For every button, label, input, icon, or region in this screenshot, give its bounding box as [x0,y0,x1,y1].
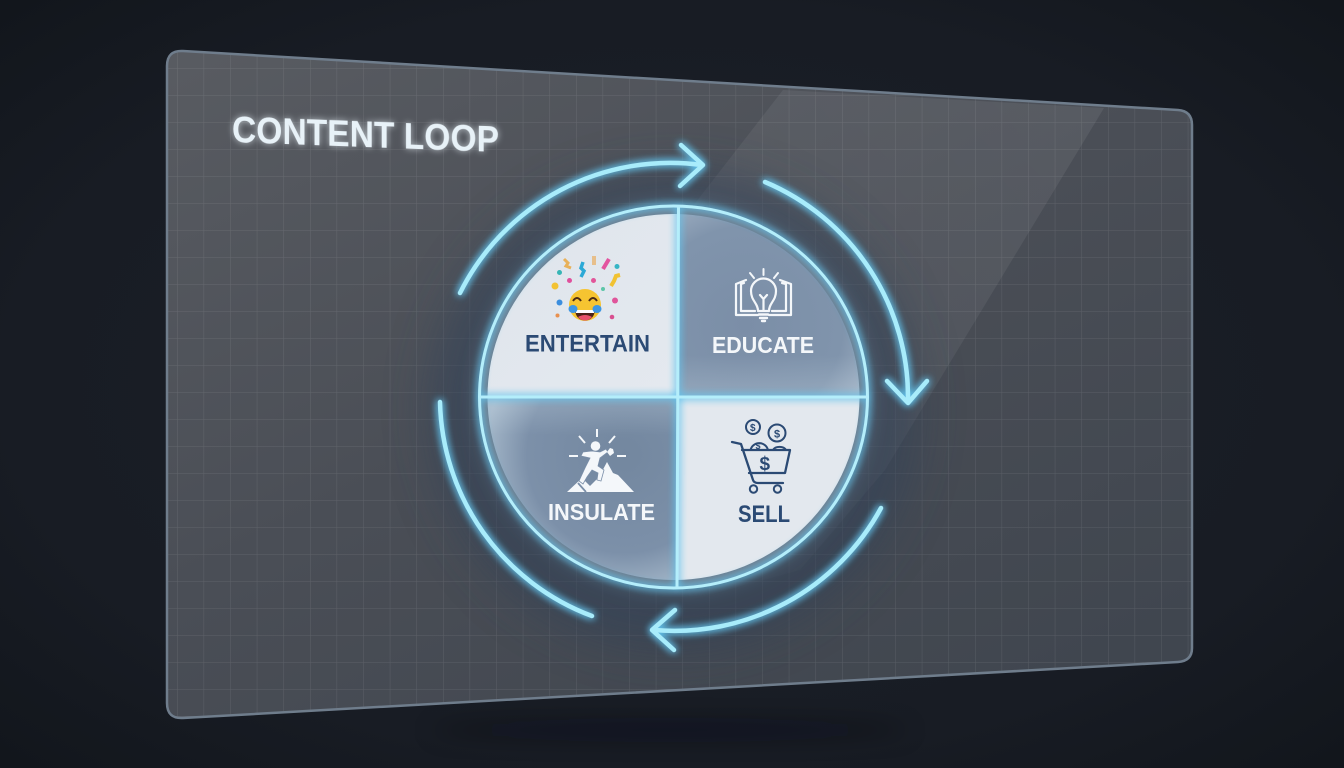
icon: dollar signs: $ [760,454,770,475]
quadrant: educate [679,214,860,396]
circle glow [476,202,872,592]
arrow: top [460,145,703,293]
icon: book and light bulb [736,269,791,321]
label: educate: EDUCATE [712,332,814,358]
quadrant: entertain [488,214,677,396]
icon: dollar signs: $ [774,428,780,440]
label: sell: SELL [738,501,790,528]
wheel ring and dividers [480,206,868,588]
label: entertain: ENTERTAIN [525,330,650,358]
panel shadow [430,724,910,736]
quadrant wheel [480,206,868,588]
icon: laughing emoji with confetti [552,256,620,321]
arrow: right [765,182,927,403]
quadrant: sell [678,398,860,580]
label: insulate: INSULATE [548,499,655,525]
icon: climber on mountain [567,429,634,492]
quadrant: insulate [488,398,676,580]
icon: dollar signs [750,423,780,475]
title: CONTENT LOOP [232,108,499,160]
icon: dollar signs: $ [750,423,756,434]
panel: glass board [167,50,1192,720]
icon: dollar signs: $ [756,441,761,451]
arrow: bottom [652,508,881,650]
arrow: left [440,402,592,616]
icon: shopping cart with coins [732,420,790,493]
